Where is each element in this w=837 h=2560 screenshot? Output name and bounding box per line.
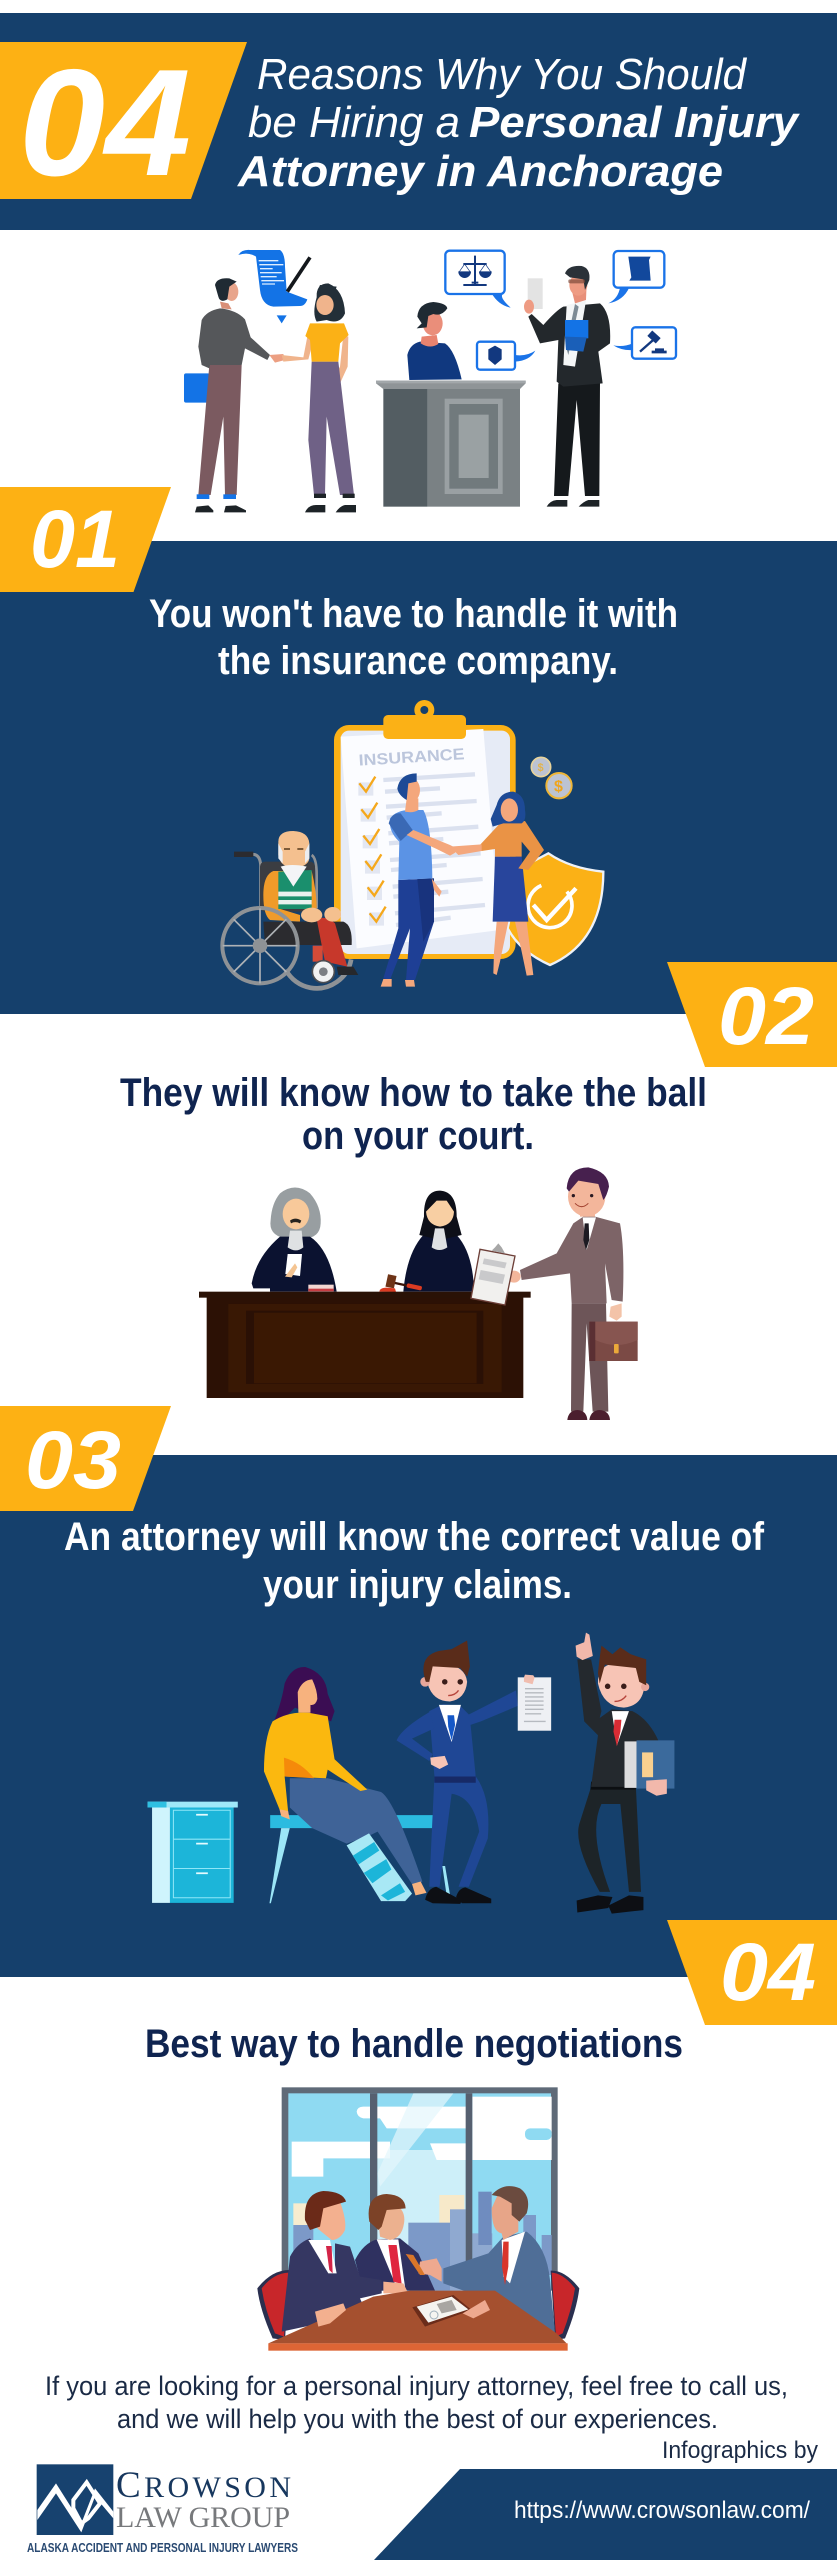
man on the left [282, 2191, 408, 2332]
heading reason 2: They will know how to take the ball [120, 1071, 707, 1115]
footer band with url [374, 2469, 837, 2560]
illustration: clients shaking hands and lawyer at podium [184, 250, 676, 512]
heading reason 4: Best way to handle negotiations [145, 2022, 683, 2066]
podium [376, 381, 526, 507]
closing paragraph: and we will help you with the best of our experiences. [117, 2404, 718, 2434]
contract scroll and pen [238, 250, 310, 323]
number tab 01: 01 [30, 494, 120, 585]
speech bubble: scroll [608, 251, 664, 303]
number tab 03: 03 [25, 1415, 121, 1506]
insurance clipboard: INSURANCE [358, 746, 465, 770]
gavel [379, 1274, 422, 1292]
attorney in blue suit [397, 1640, 551, 1904]
heading reason 3 [64, 1515, 765, 1607]
woman with leg cast [264, 1667, 426, 1901]
logo mountain mark [37, 2464, 113, 2535]
clipboard [471, 1243, 515, 1305]
heading reason 1: You won't have to handle it with [149, 592, 678, 636]
number tab 01 [0, 487, 171, 592]
speech bubble: police badge [477, 342, 535, 370]
receptionist [407, 302, 462, 380]
man in the middle [355, 2194, 435, 2291]
man in blue shirt [381, 773, 460, 987]
heading reason 3: your injury claims. [263, 1563, 572, 1607]
infographics credit: Infographics by [662, 2437, 818, 2464]
man with briefcase [184, 278, 285, 512]
red chairs [257, 2270, 579, 2340]
logo: Crowson Law Group [27, 2464, 298, 2555]
coins: $ [554, 779, 563, 796]
speech bubble: scales of justice [445, 251, 511, 308]
number tab 02 [667, 962, 837, 1067]
lawyer with paper [524, 266, 610, 507]
woman in orange blouse [450, 792, 544, 976]
checklist [358, 774, 485, 926]
closing paragraph: If you are looking for a personal injury attorney, feel free to call us, [45, 2371, 788, 2401]
logo tagline: ALASKA ACCIDENT AND PERSONAL INJURY LAWYERS [27, 2541, 298, 2555]
closing paragraph [45, 2371, 788, 2434]
attorney pointing up with folder [576, 1633, 674, 1914]
illustration: insurance clipboard and handshake [222, 700, 603, 994]
title: Attorney in Anchorage [237, 147, 723, 196]
judge with wig [252, 1187, 337, 1292]
illustration: negotiation meeting at a table [257, 2087, 579, 2351]
panel: reason 1 [0, 487, 837, 1014]
window with skyline [282, 2087, 558, 2291]
heading reason 1 [149, 592, 678, 683]
title: be Hiring a [248, 98, 460, 147]
panel: header [0, 13, 837, 230]
filing cabinet [148, 1802, 238, 1903]
title: Personal Injury [469, 98, 801, 147]
logo wordmark: CROWSON [116, 2465, 291, 2506]
speech bubble: gavel [613, 327, 676, 359]
logo wordmark: LAW GROUP [116, 2501, 290, 2534]
illustration: judges and lawyer at the bench [199, 1167, 638, 1420]
title [237, 50, 801, 196]
title: Reasons Why You Should [257, 50, 747, 99]
panel: reason 3 [0, 1406, 837, 2025]
coins: $ [538, 762, 544, 774]
heading reason 2: on your court. [302, 1114, 534, 1158]
big number 04: 04 [19, 38, 191, 208]
number tab 03 [0, 1406, 171, 1511]
heading reason 1: the insurance company. [218, 639, 618, 683]
insurance clipboard [334, 700, 516, 959]
bench [269, 1815, 450, 1903]
heading reason 2 [120, 1071, 707, 1158]
man in wheelchair [222, 831, 358, 994]
heading reason 3: An attorney will know the correct value of [64, 1515, 765, 1559]
number tab 02: 02 [718, 971, 814, 1062]
header number banner [0, 42, 247, 199]
number tab 04 [667, 1920, 837, 2025]
coins [531, 757, 572, 798]
number tab 04: 04 [720, 1927, 816, 2018]
judge with black hair [379, 1191, 474, 1292]
court desk [199, 1292, 531, 1398]
illustration: injured woman and two attorneys [148, 1633, 674, 1914]
conference table with clipboard [268, 2291, 568, 2351]
footer band with url: https://www.crowsonlaw.com/ [514, 2497, 810, 2524]
logo wordmark [116, 2465, 291, 2534]
woman in yellow top [282, 283, 356, 512]
man on the right [406, 2186, 555, 2333]
shield [508, 853, 603, 965]
lawyer with briefcase [471, 1167, 638, 1420]
